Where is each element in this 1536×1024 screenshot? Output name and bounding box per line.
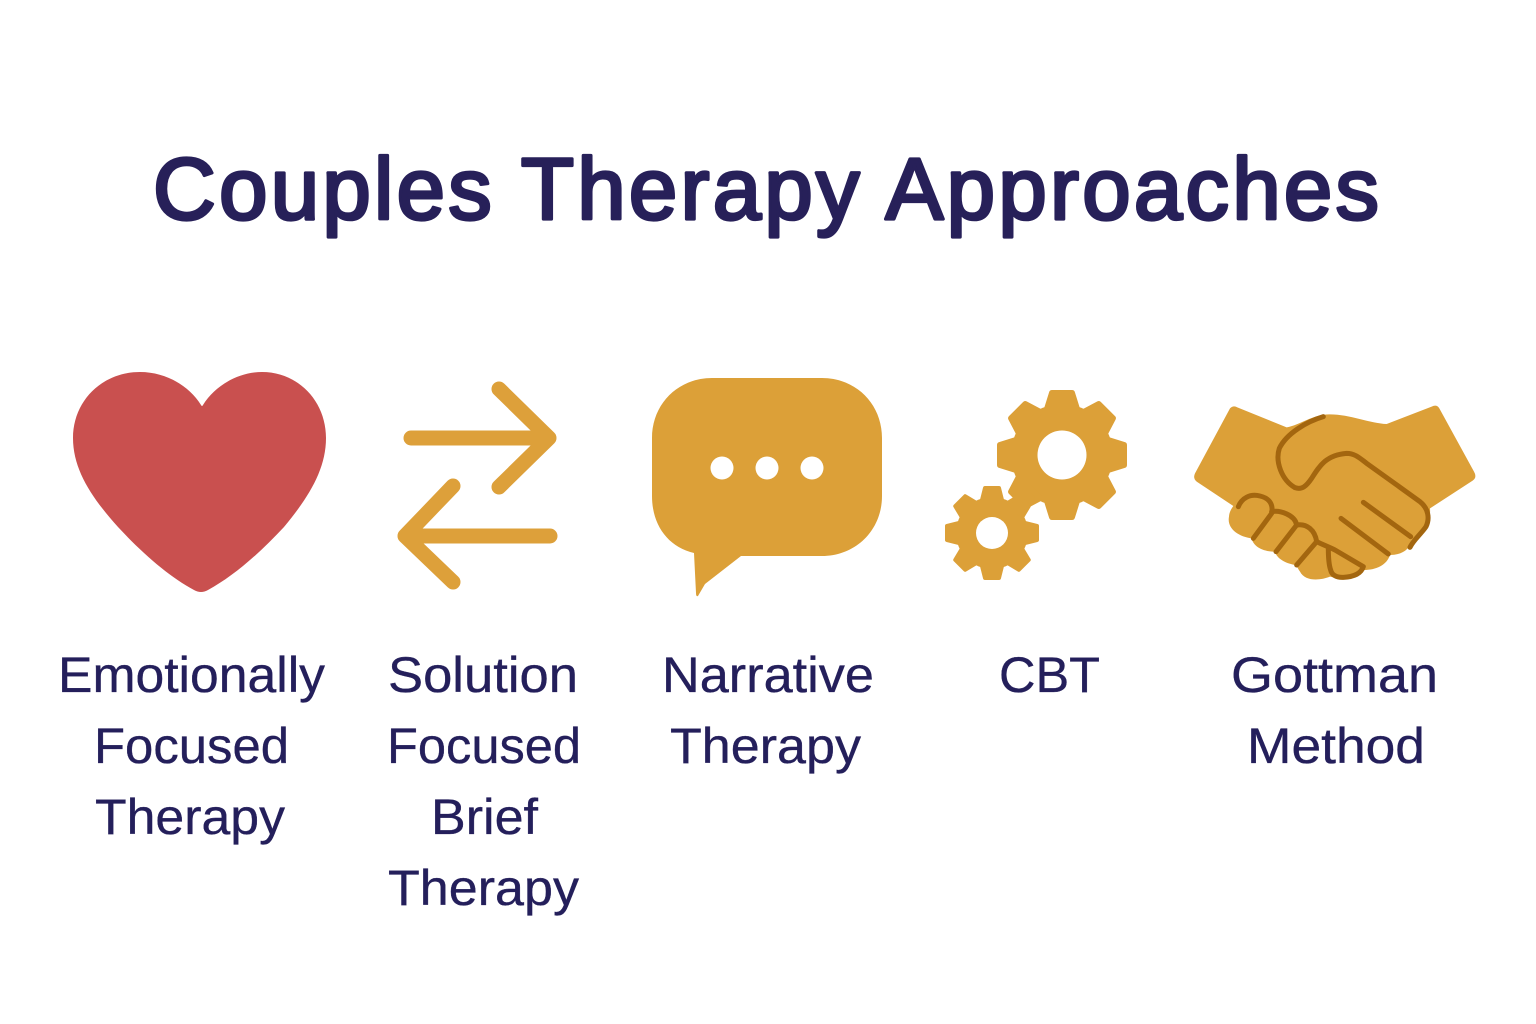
icon: gears: [947, 393, 1124, 578]
icon: handshake: [1194, 406, 1475, 580]
label: Emotionally Focused Therapy: Therapy: [95, 789, 285, 845]
label: CBT: CBT: [999, 647, 1100, 703]
label: Gottman Method: Method: [1247, 718, 1425, 774]
label: Solution Focused Brief Therapy: Therapy: [388, 860, 579, 916]
label: Solution Focused Brief Therapy: Solution: [388, 647, 578, 703]
label: Solution Focused Brief Therapy: Brief: [431, 789, 538, 845]
label: Solution Focused Brief Therapy: Focused: [387, 718, 581, 774]
small gear: [947, 488, 1037, 578]
label: Emotionally Focused Therapy: [58, 647, 325, 845]
label: Narrative Therapy: Therapy: [670, 718, 861, 774]
label: Narrative Therapy: Narrative: [662, 647, 874, 703]
large gear: [1000, 393, 1124, 517]
label: Emotionally Focused Therapy: Emotionally: [58, 647, 325, 703]
label: Narrative Therapy: [662, 647, 874, 774]
icon: speech bubble: [652, 378, 882, 596]
icon: two opposing arrows: [405, 389, 550, 582]
label: Emotionally Focused Therapy: Focused: [94, 718, 289, 774]
label: Gottman Method: Gottman: [1231, 647, 1438, 703]
title: Couples Therapy Approaches: [153, 141, 1379, 238]
icon: heart: [73, 372, 326, 592]
label: Gottman Method: [1231, 647, 1438, 774]
label: Solution Focused Brief Therapy: [387, 647, 581, 916]
